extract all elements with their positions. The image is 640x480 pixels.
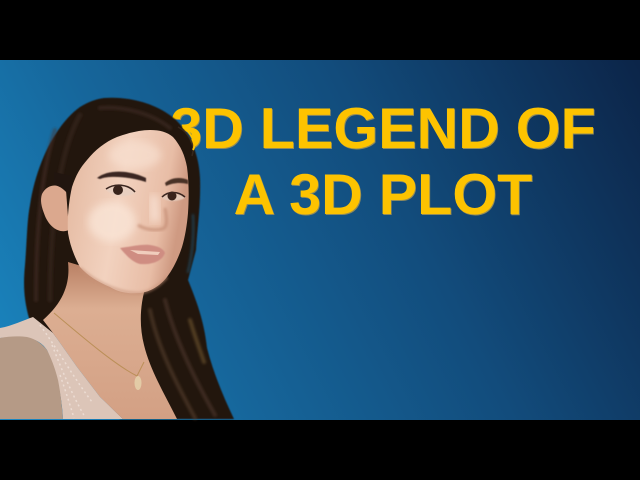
chin shadow (80, 268, 167, 293)
necklace (54, 313, 144, 376)
hair (24, 98, 234, 419)
background panel (0, 60, 640, 420)
cheek highlight (88, 202, 136, 242)
face (68, 130, 189, 293)
lace texture (40, 325, 92, 418)
neck and chest (43, 262, 177, 419)
title: A 3D PLOT (234, 163, 532, 227)
forehead highlight (109, 141, 161, 169)
ear (41, 185, 69, 231)
title (170, 97, 597, 228)
hair over ear top (54, 172, 72, 200)
lips (120, 245, 165, 264)
hair strand over digit (178, 127, 194, 156)
sweater shoulder (0, 336, 63, 419)
cardigan lace (0, 317, 123, 419)
portrait of woman (0, 98, 234, 419)
eyebrows (97, 172, 146, 182)
hair strands (36, 108, 215, 418)
nose (138, 208, 167, 230)
eyes (106, 186, 135, 196)
title: 3D LEGEND OF (171, 98, 597, 162)
title: 3D LEGEND OF (170, 97, 596, 161)
title: A 3D PLOT (234, 164, 533, 228)
